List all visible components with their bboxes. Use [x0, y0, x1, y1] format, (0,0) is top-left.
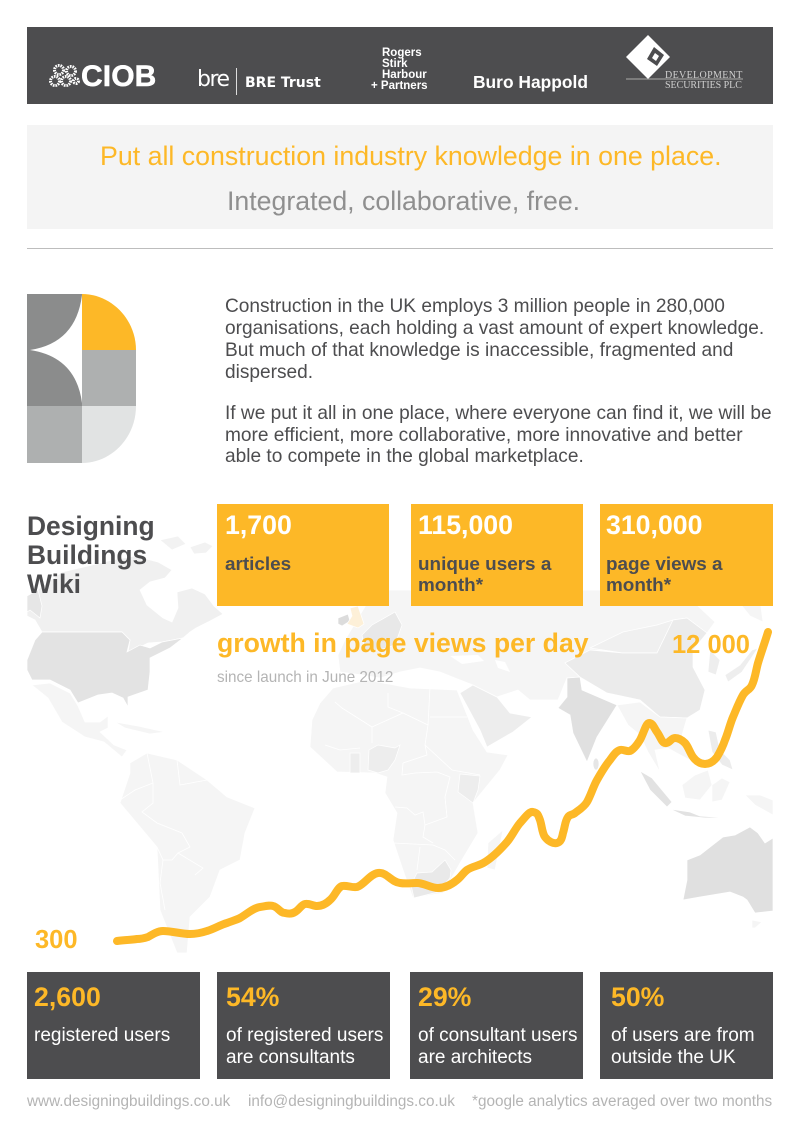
heading: growth in page views: growth in page views per day	[217, 628, 589, 658]
caption: since launch: since launch in June 2012	[217, 669, 393, 686]
stat: architects: are architects	[418, 1047, 532, 1068]
map: Nigeria	[368, 745, 400, 773]
stat: registered users: registered users	[34, 1025, 170, 1046]
paragraph: construction in the UK: dispersed.	[225, 362, 313, 383]
map: Ireland	[338, 614, 350, 626]
map: Australia	[683, 827, 773, 913]
map: New Zealand	[752, 920, 762, 928]
logo: Rogers Stirk Harbour + Partners: Stirk	[382, 58, 408, 70]
logo: Rogers Stirk Harbour + Partners	[371, 47, 428, 92]
footer: email: info@designingbuildings.co.uk	[248, 1093, 455, 1110]
map: Europe, Russia, Central Asia	[338, 590, 715, 700]
map: Canada	[27, 556, 223, 653]
paragraph: construction in the UK	[225, 296, 764, 383]
stat: page views	[600, 504, 773, 606]
map: Mexico and Central America	[32, 683, 127, 757]
map: Mongolia	[590, 620, 673, 653]
stat: page views: 310,000	[606, 510, 702, 540]
logo: Development Securities	[626, 35, 743, 91]
logo: CIOB: CIOB	[81, 60, 156, 93]
stat: outside the UK: outside the UK	[611, 1047, 736, 1068]
stat: articles: articles	[225, 554, 291, 575]
stat: outside the UK: of users are from	[611, 1025, 755, 1046]
stat: consultants: are consultants	[226, 1047, 355, 1068]
map: South American borders	[120, 753, 207, 910]
heading: Designing Buildings Wiki: Buildings	[27, 540, 147, 570]
label: chart start value: 300	[35, 926, 78, 954]
heading: Designing Buildings Wiki: Wiki	[27, 569, 81, 599]
paragraph: construction in the UK: organisations, each holding a vast amount of expert knowledge.	[225, 318, 764, 339]
header band with partner logos	[27, 27, 773, 104]
paragraph: one place: If we put it all in one place, where everyone can find it, we will be	[225, 403, 772, 424]
footer: analytics note: *google analytics averaged over two months	[472, 1093, 772, 1110]
logo: BRE Trust: bre	[197, 67, 229, 92]
map: Arabia	[460, 685, 532, 747]
stat: page views: page views a	[606, 554, 723, 575]
stat: consultants: of registered users	[226, 1025, 383, 1046]
map: India	[558, 677, 617, 762]
stat: outside the UK	[600, 972, 773, 1079]
stat: unique users: unique users a	[418, 554, 551, 575]
stat: registered users	[27, 972, 200, 1079]
label: chart end value: 12 000	[672, 631, 750, 659]
icon: Designing Buildings D logo	[27, 294, 136, 463]
map: Ghana	[350, 753, 360, 773]
stat: architects	[410, 972, 583, 1079]
subheading: tagline: Integrated, collaborative, free.	[227, 186, 580, 216]
logo: Development Securities: SECURITIES PLC	[665, 80, 742, 91]
map: Sri Lanka	[593, 758, 599, 770]
paragraph: one place	[225, 403, 772, 467]
paragraph: construction in the UK: But much of that knowledge is inaccessible, fragmented and	[225, 340, 733, 361]
map: Alaska	[27, 590, 42, 618]
paragraph: one place: able to compete in the global marketplace.	[225, 446, 584, 467]
logo: Rogers Stirk Harbour + Partners: Harbour	[382, 69, 427, 81]
logo: BRE Trust: BRE Trust	[245, 75, 321, 91]
stat: articles	[217, 504, 389, 606]
map: South-East Asia	[617, 702, 690, 772]
map: Caribbean	[115, 722, 165, 734]
footer: website: www.designingbuildings.co.uk	[27, 1093, 230, 1110]
icon: diamond	[626, 35, 743, 80]
icon: CIOB crest	[49, 64, 80, 87]
heading: tagline: Put all construction industry knowledge in one place.	[100, 141, 722, 171]
logo: BRE Trust	[197, 67, 321, 95]
heading: Designing Buildings Wiki	[27, 511, 155, 599]
map: Japan and Korea	[708, 648, 758, 682]
stat: registered users: 2,600	[34, 982, 101, 1012]
footer	[27, 1093, 772, 1110]
stat: architects: 29%	[418, 982, 471, 1012]
text block: introduction	[225, 296, 772, 467]
logo: Buro Happold: Buro Happold	[473, 72, 588, 92]
stat: outside the UK: 50%	[611, 982, 664, 1012]
stat: consultants	[217, 972, 390, 1079]
map: Java	[670, 809, 730, 818]
heading: Designing Buildings Wiki: Designing	[27, 511, 155, 541]
stat: unique users	[411, 504, 583, 606]
map: Caspian and Black Sea	[450, 655, 510, 672]
tagline panel	[27, 125, 773, 229]
map: Germany and France	[362, 612, 402, 650]
map: South Africa	[411, 860, 451, 898]
map: Borneo	[682, 770, 712, 800]
paragraph: construction in the UK: Construction in the UK employs 3 million people in 280,000	[225, 296, 725, 317]
map: Madagascar	[487, 830, 503, 870]
stat: articles: 1,700	[225, 510, 292, 540]
map: Kenya	[458, 774, 480, 803]
stat: page views: month*	[606, 575, 671, 596]
logo: Rogers Stirk Harbour + Partners: Rogers	[382, 47, 422, 59]
map: Greenland and Arctic islands	[160, 536, 213, 554]
logo: Rogers Stirk Harbour + Partners: + Partners	[371, 80, 428, 92]
stat: unique users: month*	[418, 575, 483, 596]
map: United Kingdom	[347, 606, 364, 628]
map: South America	[120, 753, 255, 953]
stat: consultants: 54%	[226, 982, 279, 1012]
map: Africa	[310, 680, 508, 898]
map: China	[565, 618, 707, 718]
map: New Guinea	[745, 795, 773, 815]
map: USA	[27, 632, 183, 707]
map: Kamchatka	[740, 590, 763, 622]
stat: unique users: 115,000	[418, 510, 513, 540]
map: Sumatra	[640, 771, 672, 807]
map: African borders	[325, 687, 480, 870]
stat: architects: of consultant users	[418, 1025, 577, 1046]
logo: Development Securities: DEVELOPMENT	[665, 70, 743, 81]
map: Philippines	[708, 730, 733, 770]
paragraph: one place: more efficient, more collaborative, more innovative and better	[225, 424, 743, 446]
map: Sulawesi and islands	[712, 778, 730, 802]
